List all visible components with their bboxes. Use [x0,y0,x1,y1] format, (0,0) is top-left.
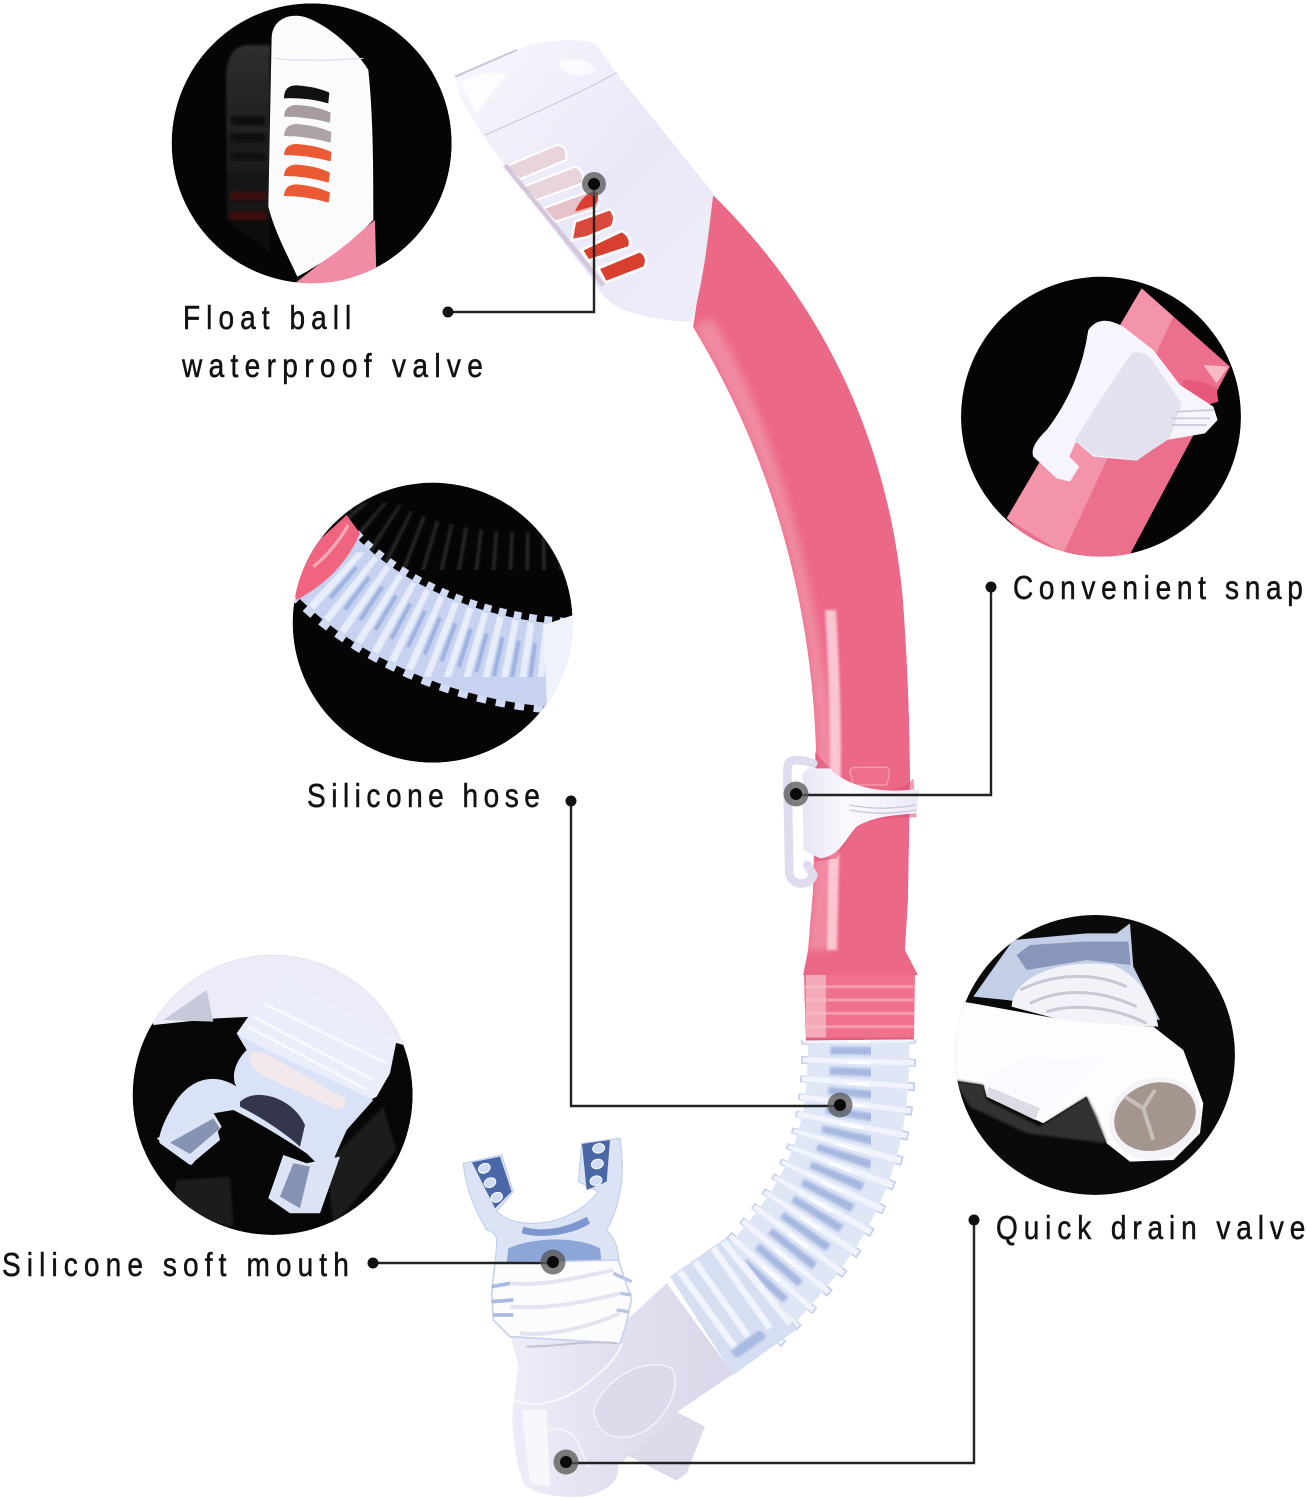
snorkel dry-top head [455,40,713,322]
label: convenient snap: Convenient snap [1013,570,1303,607]
part markers [540,172,852,1474]
panel: silicone hose close-up [287,483,573,763]
panel: convenient snap close-up [961,277,1241,570]
silicone mouthpiece [463,1138,632,1347]
panel: silicone soft mouth close-up [130,955,420,1235]
label: float ball waterproof valve: waterproof valve [181,348,483,385]
leader line: silicone soft mouth [373,1262,553,1264]
flexible silicone hose [670,1040,859,1375]
snorkel pink tube [693,195,918,975]
leader line: convenient snap [796,587,991,795]
label: silicone soft mouth: Silicone soft mouth [2,1247,349,1284]
leader line: float ball valve [448,184,594,312]
label: quick drain valve: Quick drain valve [996,1210,1305,1247]
convenient snap clip [787,752,919,884]
label: float ball waterproof valve [181,300,483,385]
main product: dry snorkel [455,40,919,1497]
label: silicone hose: Silicone hose [307,778,540,815]
label dots [368,306,996,1268]
leader line: silicone hose [571,801,840,1106]
white T-body and purge valve [510,1283,733,1497]
leader line: quick drain valve [566,1220,974,1463]
panel: float ball valve close-up [172,3,452,287]
ribbed pink connector [804,975,915,1042]
panel: quick drain valve close-up [950,915,1235,1195]
label: float ball waterproof valve: Float ball [183,300,351,337]
